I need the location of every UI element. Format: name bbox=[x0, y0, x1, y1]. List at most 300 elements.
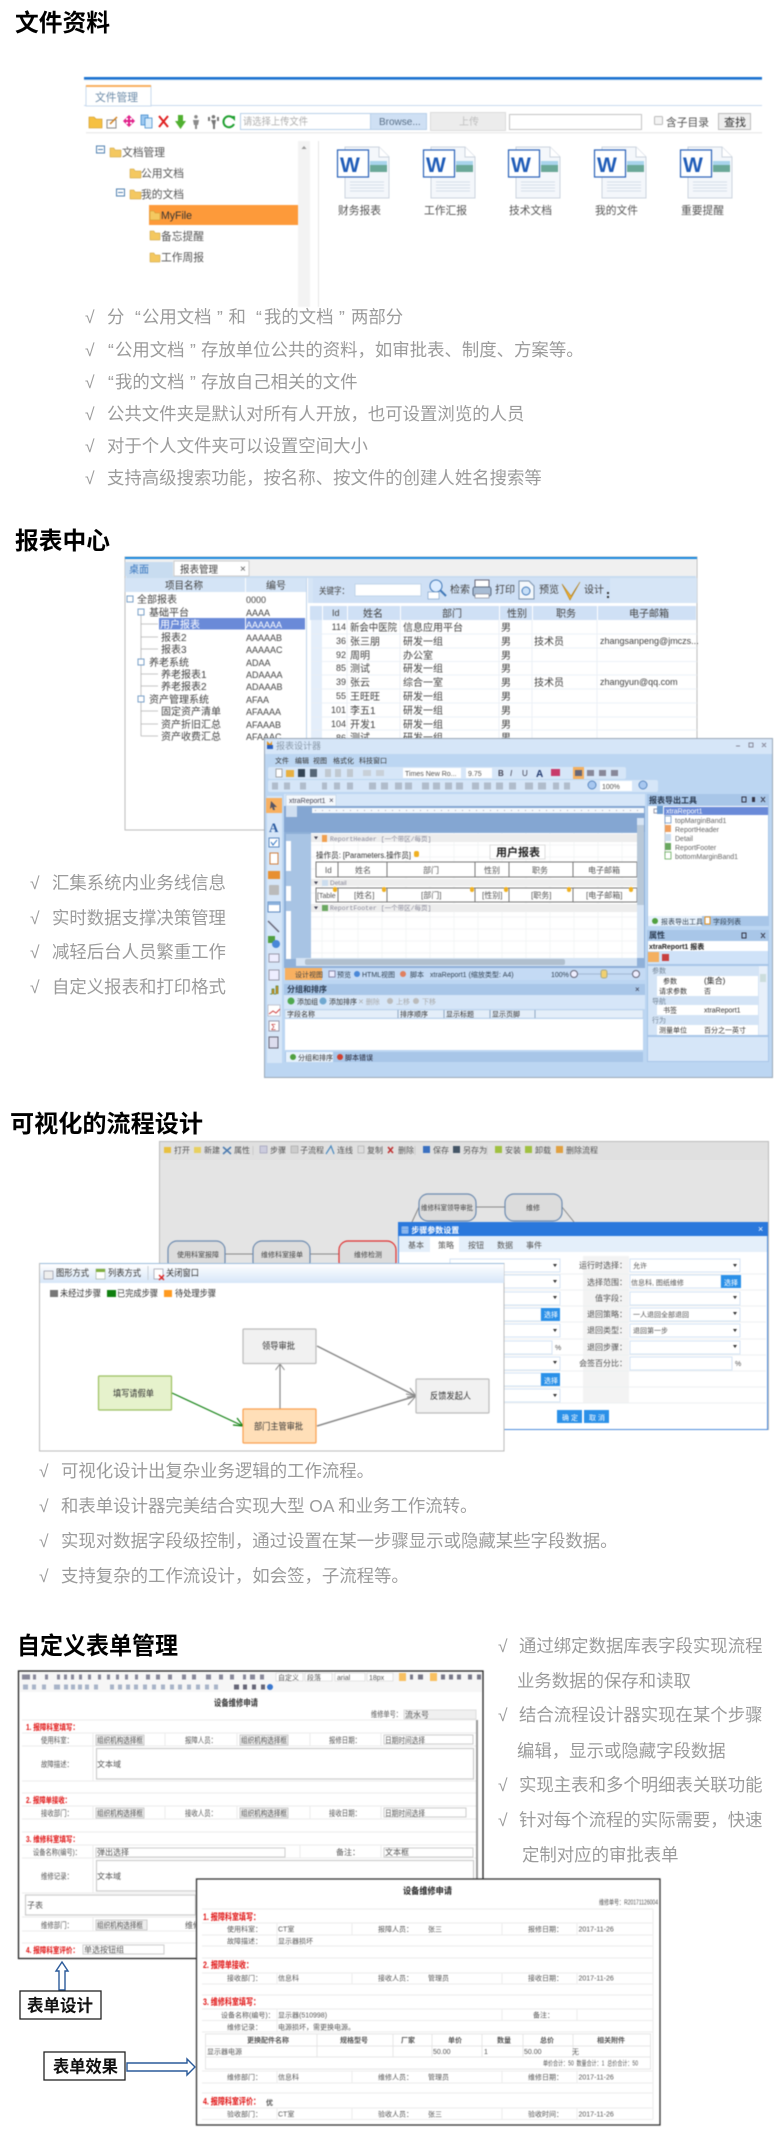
pane: 分组和排序: 排序顺序 bbox=[400, 1010, 428, 1018]
form title and number: 设备维修申请 bbox=[214, 1697, 258, 1708]
form section 1: 故障描述： bbox=[41, 1759, 73, 1769]
heading: 可视化的流程设计: 可视化的流程设计 bbox=[10, 1111, 203, 1138]
report tree grid: 固定资产清单 bbox=[161, 705, 221, 718]
report data table: 研发一组 bbox=[403, 662, 443, 675]
report data table: 男 bbox=[501, 719, 511, 731]
report data table: 信息应用平台 bbox=[403, 621, 463, 634]
report tree grid: ADAAAB bbox=[246, 682, 283, 692]
result section 2: 接收部门： bbox=[227, 1974, 262, 1982]
graph toolbar: 列表方式 bbox=[108, 1267, 141, 1278]
checkbox: 含子目录 bbox=[654, 115, 709, 129]
report tree grid: 0000 bbox=[246, 595, 266, 605]
text block: file feature bullets: √ bbox=[85, 404, 95, 424]
text block: form bullets: 结合流程设计器实现在某个步骤 bbox=[519, 1705, 762, 1725]
node: 反馈发起人: 反馈发起人 bbox=[430, 1390, 471, 1401]
text block: report bullets: 自定义报表和打印格式 bbox=[52, 977, 226, 997]
designer canvas: 操作员: [Parameters.操作员] bbox=[316, 850, 411, 860]
form section 3: 弹出选择 bbox=[97, 1847, 129, 1857]
designer status bar: 脚本 bbox=[410, 970, 424, 979]
designer canvas bbox=[284, 794, 645, 968]
file labels: 我的文件 bbox=[595, 203, 638, 217]
folder tree bbox=[96, 145, 298, 264]
text block: file feature bullets: “ bbox=[108, 372, 114, 392]
folder tree: 备忘提醒 bbox=[161, 229, 204, 243]
report data table: 办公室 bbox=[403, 649, 433, 662]
report data table: 综合一室 bbox=[403, 676, 443, 689]
report data table: 男 bbox=[501, 705, 511, 717]
pane: 报表导出工具: Detail bbox=[675, 836, 693, 843]
report data table: 研发一组 bbox=[403, 704, 443, 717]
report tree grid: 资产折旧汇总 bbox=[161, 718, 221, 731]
result section 3 bbox=[203, 1996, 554, 2031]
designer canvas: [Table bbox=[317, 893, 336, 900]
text block: file feature bullets: 分 bbox=[107, 307, 124, 327]
pane: 报表导出工具: ReportHeader bbox=[675, 827, 720, 834]
report data table: 研发一组 bbox=[403, 690, 443, 703]
dialog buttons: 取 消 bbox=[589, 1413, 605, 1422]
designer status bar: xtraReport1 (缩放类型: A4) bbox=[430, 970, 514, 979]
report tree grid: AAAAAA bbox=[246, 620, 282, 630]
report data table: 男 bbox=[501, 677, 511, 689]
workflow toolbar: 卸载 bbox=[535, 1145, 551, 1155]
report data table bbox=[310, 606, 699, 744]
text block: report bullets: √ bbox=[30, 908, 40, 928]
designer menu and toolbars: 编辑 bbox=[295, 756, 309, 765]
pane: 分组和排序: 添加组 bbox=[297, 997, 318, 1006]
button: 查找 bbox=[718, 114, 750, 130]
panel: report designer window bbox=[264, 738, 772, 1078]
pane: 分组和排序: × bbox=[635, 985, 640, 994]
result section 3: 备注： bbox=[533, 2011, 554, 2020]
designer menu and toolbars: 9.75 bbox=[468, 771, 482, 778]
dialog right column fields: 值字段： bbox=[595, 1293, 627, 1303]
form section 4: 4. 报障科室评价： bbox=[26, 1945, 79, 1955]
dialog buttons bbox=[557, 1410, 609, 1423]
dialog right column fields: 退回第一步 bbox=[633, 1326, 668, 1335]
designer menu and toolbars: 格式化 bbox=[333, 756, 354, 765]
result section 4: 2017-11-26 bbox=[578, 2112, 614, 2118]
result section 3: 设备名称(编号)： bbox=[221, 2011, 275, 2020]
result section 2: 接收人员： bbox=[378, 1974, 413, 1982]
tabs: 桌面 / 报表管理: × bbox=[240, 564, 246, 575]
text block: workflow bullets: √ bbox=[39, 1531, 49, 1551]
panel: form designer window bbox=[18, 1671, 483, 1958]
result repair row: 维修人员： bbox=[378, 2073, 413, 2082]
form section 1: 1. 报障科室填写： bbox=[26, 1722, 79, 1732]
report data table: 55 bbox=[336, 691, 346, 701]
graph toolbar: 图形方式 bbox=[56, 1267, 89, 1278]
report tree grid: AAAAAC bbox=[246, 645, 283, 655]
result parts table: 数量 bbox=[497, 2036, 511, 2045]
tree scrollbar bbox=[298, 141, 319, 307]
pane: 分组和排序: 下移 bbox=[422, 997, 436, 1006]
dialog right column fields: 允许 bbox=[633, 1261, 647, 1270]
report data table: 张三朋 bbox=[350, 636, 380, 648]
report tree grid: AAAAAB bbox=[246, 633, 282, 643]
designer canvas: 用户报表 bbox=[496, 845, 540, 859]
text block: form bullets: 实现主表和多个明细表关联功能 bbox=[519, 1775, 762, 1795]
text block: form bullets: 针对每个流程的实际需要，快速 bbox=[519, 1810, 762, 1830]
icon: word doc 重要提醒: W bbox=[683, 154, 703, 177]
pane: 属性: 参数 bbox=[652, 966, 666, 975]
designer status bar: 100% bbox=[551, 972, 569, 979]
report data table: 101 bbox=[331, 705, 346, 715]
report tree grid: 养老报表1 bbox=[161, 668, 207, 681]
result section 4: 优 bbox=[266, 2098, 273, 2107]
result repair row: 2017-11-26 bbox=[578, 2075, 614, 2082]
designer canvas: ReportFooter [一个带区/每页] bbox=[330, 903, 431, 912]
pane: 报表导出工具: bottomMarginBand1 bbox=[675, 854, 738, 861]
panel: workflow designer background window bbox=[160, 1142, 768, 1430]
result title bbox=[403, 1885, 658, 1906]
flow edges bbox=[172, 1346, 416, 1426]
node: 领导审批 bbox=[243, 1329, 316, 1364]
text block: workflow bullets: 和表单设计器完美结合实现大型 OA 和业务工作流转。 bbox=[61, 1496, 477, 1516]
report toolbar: 检索 bbox=[450, 583, 470, 596]
dialog right column fields: 退回步骤： bbox=[587, 1343, 627, 1352]
report data table: 性别 bbox=[507, 607, 527, 620]
report data table: 技术员 bbox=[534, 676, 564, 689]
designer status bar: 设计视图 bbox=[295, 970, 323, 979]
file labels: 财务报表 bbox=[338, 203, 381, 217]
report tree grid: 报表3 bbox=[161, 643, 187, 656]
pane: 分组和排序 bbox=[284, 984, 645, 1062]
legend: 待处理步骤 bbox=[175, 1288, 216, 1298]
designer canvas: Detail bbox=[330, 880, 347, 887]
folder tree: 文档管理 bbox=[122, 145, 165, 159]
result section 1: 张三 bbox=[428, 1924, 442, 1934]
workflow toolbar: 新建 bbox=[204, 1145, 220, 1155]
text block: file feature bullets: “ bbox=[135, 307, 141, 327]
step parameter dialog: 事件 bbox=[526, 1240, 542, 1250]
report data table: 男 bbox=[501, 636, 511, 648]
checkbox: 含子目录: 含子目录 bbox=[666, 115, 709, 129]
designer canvas: × bbox=[329, 796, 334, 805]
result section 2: 管理员 bbox=[428, 1974, 449, 1982]
designer menu and toolbars: 100% bbox=[602, 784, 620, 791]
designer left tool strip: A bbox=[269, 820, 279, 835]
result title: 设备维修申请 bbox=[403, 1885, 452, 1896]
form section 3: 备注： bbox=[336, 1847, 360, 1857]
report tree grid bbox=[125, 578, 307, 743]
dialog right column fields: 运行时选择： bbox=[579, 1260, 627, 1270]
text block: file feature bullets: ” bbox=[217, 307, 223, 327]
form section 2: 接收日期： bbox=[329, 1808, 361, 1818]
result section 4: 验收部门： bbox=[227, 2110, 262, 2118]
report data table: 测试 bbox=[350, 662, 370, 675]
panel: report manager window bbox=[125, 557, 699, 830]
text block: form bullets: 定制对应的审批表单 bbox=[522, 1845, 679, 1865]
flow nodes: background: 维修科室领导审批 bbox=[421, 1203, 473, 1212]
report data table: 男 bbox=[501, 622, 511, 634]
file labels: 重要提醒 bbox=[681, 203, 724, 217]
form section 1: 报修日期： bbox=[329, 1735, 361, 1745]
text block: workflow bullets: 实现对数据字段级控制，通过设置在某一步骤显示或隐藏某些字段数据。 bbox=[61, 1531, 618, 1551]
text block: form bullets: √ bbox=[498, 1810, 508, 1830]
editor toolbar: arial bbox=[337, 1675, 351, 1682]
text block: report bullets bbox=[30, 873, 226, 997]
panel: file manager screenshot bbox=[84, 77, 762, 307]
node: 填写请假单 bbox=[98, 1376, 172, 1410]
designer menu and toolbars: I bbox=[510, 769, 513, 778]
designer menu and toolbars: U bbox=[522, 769, 528, 778]
form section 3: 维修记录： bbox=[41, 1871, 73, 1881]
result section 1 bbox=[203, 1911, 614, 1946]
workflow toolbar: 删除流程 bbox=[566, 1145, 598, 1155]
report tree grid: ADAA bbox=[246, 658, 271, 668]
folder tree: 我的文档 bbox=[141, 187, 184, 201]
result parts table: 50.00 bbox=[524, 2049, 542, 2056]
icon: word doc 工作汇报 bbox=[424, 147, 475, 198]
form section 3: 维修部门： bbox=[41, 1920, 73, 1930]
node: 填写请假单: 填写请假单 bbox=[113, 1388, 154, 1398]
result parts table: 更换配件名称 bbox=[247, 2036, 289, 2045]
flow nodes: background: 维修 bbox=[526, 1203, 540, 1212]
folder tree: MyFile bbox=[161, 210, 192, 222]
form section 2: 日期时间选择 bbox=[385, 1808, 425, 1818]
text block: report bullets: √ bbox=[30, 977, 40, 997]
result section 1: 使用科室： bbox=[227, 1924, 262, 1934]
report data table: 36 bbox=[336, 636, 346, 646]
result section 1: 报障人员： bbox=[378, 1924, 413, 1934]
result section 1: 显示器损坏 bbox=[278, 1936, 313, 1946]
tab: 文件管理: 文件管理 bbox=[95, 90, 138, 104]
pane: 属性: 行为 bbox=[652, 1016, 666, 1024]
designer menu and toolbars: 文件 bbox=[275, 756, 289, 765]
report data table: 86 bbox=[336, 733, 346, 743]
dialog right column fields: % bbox=[735, 1361, 741, 1368]
label: 表单效果 bbox=[44, 2052, 125, 2080]
result section 4 bbox=[203, 2096, 614, 2118]
report data table: 男 bbox=[501, 650, 511, 662]
designer menu and toolbars bbox=[268, 756, 658, 792]
arrow: up to form design window bbox=[56, 1962, 68, 1990]
arrow: right to result window bbox=[127, 2059, 195, 2075]
designer title bar bbox=[265, 739, 772, 754]
designer left tool strip bbox=[266, 796, 282, 1063]
label: 表单效果: 表单效果 bbox=[53, 2058, 118, 2076]
dialog right column fields: 会签百分比： bbox=[579, 1358, 627, 1368]
workflow toolbar: 保存 bbox=[433, 1145, 449, 1155]
pane: 分组和排序: 显示页脚 bbox=[492, 1010, 520, 1018]
report data table: 周明 bbox=[350, 650, 370, 662]
report data table: Id bbox=[332, 608, 340, 618]
report data table: 研发一组 bbox=[403, 718, 443, 731]
pane: 分组和排序: 显示标题 bbox=[446, 1010, 474, 1018]
form section 1: 组织机构选择框 bbox=[241, 1735, 287, 1745]
workflow toolbar: 复制 bbox=[367, 1145, 383, 1155]
designer canvas: 姓名 bbox=[355, 865, 371, 875]
workflow toolbar: 连线 bbox=[337, 1145, 353, 1155]
report data table: 男 bbox=[501, 663, 511, 675]
designer menu and toolbars: 视图 bbox=[313, 756, 327, 765]
report tree grid: 全部报表 bbox=[137, 593, 177, 606]
step parameter dialog: 基本 bbox=[408, 1240, 424, 1250]
designer canvas: 部门 bbox=[423, 865, 439, 875]
flow nodes: background: 维修检测 bbox=[354, 1250, 382, 1259]
dialog left column visible fields: % bbox=[555, 1345, 561, 1352]
text block: file feature bullets: 对于个人文件夹可以设置空间大小 bbox=[107, 436, 368, 456]
designer canvas: [电子邮箱] bbox=[586, 890, 622, 900]
form section 2 bbox=[26, 1795, 466, 1818]
report data table: 104 bbox=[331, 719, 346, 729]
report data table: 部门 bbox=[442, 607, 462, 620]
editor toolbar: 段落 bbox=[307, 1673, 321, 1682]
designer canvas: xtraReport1 bbox=[289, 798, 326, 805]
text block: report bullets: 实时数据支撑决策管理 bbox=[52, 908, 226, 928]
text block: form bullets: √ bbox=[498, 1705, 508, 1725]
icon: word doc 我的文件 bbox=[594, 147, 646, 198]
text block: report bullets: 减轻后台人员繁重工作 bbox=[52, 942, 226, 962]
result parts table: 50.00 bbox=[433, 2049, 451, 2056]
report data table: 男 bbox=[501, 732, 511, 744]
text block: file feature bullets: 我的文档 bbox=[264, 307, 334, 327]
report data table: zhangsanpeng@jmczs... bbox=[600, 636, 699, 646]
form section 3: 组织机构选择框 bbox=[97, 1920, 143, 1930]
file labels: 技术文档 bbox=[509, 203, 552, 217]
form section 4: 单选按钮组 bbox=[84, 1944, 124, 1954]
text block: file feature bullets: 公用文档 bbox=[115, 340, 185, 360]
report data table: 研发一组 bbox=[403, 635, 443, 648]
pane: 属性: xtraReport1 bbox=[704, 1008, 741, 1014]
report data table: 张云 bbox=[350, 677, 370, 689]
report data table: 研发一组 bbox=[403, 731, 443, 744]
result section 2 bbox=[203, 1959, 614, 1982]
designer canvas: [职务] bbox=[531, 890, 551, 900]
pane: 报表导出工具: 字段列表 bbox=[713, 917, 741, 926]
text block: report bullets: √ bbox=[30, 873, 40, 893]
text block: report bullets: 汇集系统内业务线信息 bbox=[52, 873, 226, 893]
form section 3: 文本框 bbox=[385, 1847, 409, 1857]
form section 3: 3. 维修科室填写： bbox=[26, 1834, 79, 1844]
result section 2: 信息科 bbox=[278, 1974, 299, 1982]
dialog left column visible fields: 选择 bbox=[544, 1310, 558, 1319]
report tree grid: 项目名称 bbox=[165, 579, 203, 592]
text block: form bullets bbox=[498, 1636, 762, 1865]
node: 反馈发起人 bbox=[416, 1379, 489, 1413]
designer menu and toolbars: 科技窗口 bbox=[359, 756, 387, 765]
step parameter dialog bbox=[398, 1222, 768, 1430]
pane: 属性: 参数 bbox=[663, 976, 677, 986]
legend: 未经过步骤 bbox=[60, 1288, 101, 1298]
step parameter dialog: 按钮 bbox=[468, 1240, 484, 1250]
result repair row: 维修部门： bbox=[227, 2073, 262, 2082]
icon: word doc 我的文件: W bbox=[597, 154, 617, 177]
text block: workflow bullets bbox=[39, 1461, 618, 1586]
result parts table: 无 bbox=[572, 2048, 579, 2056]
form section 2: 组织机构选择框 bbox=[241, 1808, 287, 1818]
designer canvas: [性别] bbox=[482, 890, 502, 900]
editor toolbar: 18px bbox=[369, 1675, 385, 1682]
form section 3: 设备名称(编号)： bbox=[33, 1847, 81, 1857]
label: 表单设计: 表单设计 bbox=[27, 1996, 93, 2016]
text block: file feature bullets: √ bbox=[85, 307, 95, 327]
result parts table: 1 bbox=[484, 2049, 488, 2056]
text block: file feature bullets: 两部分 bbox=[351, 307, 403, 327]
file labels: 工作汇报 bbox=[424, 203, 467, 217]
designer menu and toolbars: Times New Ro... bbox=[405, 771, 457, 778]
form section 1: 文本域 bbox=[97, 1759, 121, 1769]
designer status bar: 预览 bbox=[337, 970, 351, 979]
text block: form bullets: √ bbox=[498, 1775, 508, 1795]
folder tree: 工作周报 bbox=[161, 250, 204, 264]
heading: 文件资料: 文件资料 bbox=[15, 9, 110, 37]
form section 1: 使用科室： bbox=[41, 1735, 73, 1745]
text block: file feature bullets: ” bbox=[190, 372, 196, 392]
pane: 报表导出工具: xtraReport1 bbox=[666, 808, 703, 816]
report tree grid: AFAAAB bbox=[246, 720, 281, 730]
result parts table: 单价 bbox=[448, 2036, 462, 2045]
editor toolbar: 自定义 bbox=[278, 1673, 299, 1682]
designer menu and toolbars: A bbox=[536, 769, 543, 780]
report toolbar: 预览 bbox=[539, 583, 559, 596]
form section 3 bbox=[26, 1834, 474, 1930]
report data table: 技术员 bbox=[534, 635, 564, 648]
pane: 分组和排序: 添加排序 bbox=[329, 997, 357, 1006]
result section 1: 1. 报障科室填写： bbox=[203, 1911, 260, 1922]
upload file input bbox=[240, 114, 426, 130]
pane: 属性 bbox=[647, 930, 769, 1062]
form section 1: 组织机构选择框 bbox=[97, 1735, 143, 1745]
designer canvas: ReportHeader [一个带区/每页] bbox=[330, 834, 431, 843]
result parts table: 单价合计：50 数量合计：1 总价合计：50 bbox=[543, 2059, 638, 2068]
tabs: 桌面 / 报表管理: 报表管理 bbox=[180, 563, 218, 576]
result section 4: 4. 报障科室评价： bbox=[203, 2096, 260, 2106]
step parameter dialog: 数据 bbox=[497, 1240, 513, 1250]
graph toolbar: 关闭窗口 bbox=[166, 1267, 199, 1278]
dialog right column fields: 选择范围： bbox=[587, 1277, 627, 1287]
pane: 属性: 百分之一英寸 bbox=[704, 1026, 746, 1034]
form section 1: 日期时间选择 bbox=[385, 1735, 425, 1745]
result section 1: 故障描述： bbox=[227, 1936, 262, 1946]
form grid bbox=[22, 1720, 478, 1955]
text block: file feature bullets: 公共文件夹是默认对所有人开放，也可设置浏览的人员 bbox=[107, 404, 524, 424]
editor toolbar bbox=[20, 1672, 482, 1692]
pane: 属性: 测量单位 bbox=[659, 1026, 687, 1034]
text block: workflow bullets: √ bbox=[39, 1566, 49, 1586]
legend: 已完成步骤 bbox=[117, 1288, 158, 1298]
flow nodes: background: 使用科室报障 bbox=[177, 1250, 219, 1259]
designer canvas: 电子邮箱 bbox=[588, 865, 620, 875]
report data table: 92 bbox=[336, 650, 346, 660]
upload file input: Browse... bbox=[379, 117, 421, 128]
designer status bar: HTML视图 bbox=[362, 970, 395, 979]
text block: form bullets: 通过绑定数据库表字段实现流程 bbox=[519, 1636, 762, 1656]
form title and number: 流水号 bbox=[405, 1710, 429, 1720]
button: 上传: 上传 bbox=[459, 116, 479, 128]
designer canvas: [姓名] bbox=[354, 890, 374, 900]
result section 4: 验收时间： bbox=[528, 2110, 563, 2118]
result section 3: 维修记录： bbox=[227, 2022, 262, 2031]
result section 2: 接收日期： bbox=[528, 1974, 563, 1982]
text block: workflow bullets: √ bbox=[39, 1461, 49, 1481]
panel: workflow graph window bbox=[40, 1263, 504, 1451]
node: 部门主管审批: 部门主管审批 bbox=[254, 1420, 303, 1432]
report tree grid: 编号 bbox=[266, 579, 286, 592]
text block: form bullets: 业务数据的保存和读取 bbox=[517, 1671, 691, 1691]
dialog left column visible fields: 选择 bbox=[544, 1376, 558, 1385]
report data table: 新会中医院 bbox=[350, 621, 397, 634]
step parameter dialog: ▦ 步骤参数设置 bbox=[401, 1225, 459, 1235]
text block: form bullets: √ bbox=[498, 1636, 508, 1656]
text block: file feature bullets: ” bbox=[339, 307, 345, 327]
pane: 属性: (集合) bbox=[704, 976, 726, 986]
node: 部门主管审批 bbox=[243, 1409, 316, 1443]
report data table: 男 bbox=[501, 691, 511, 703]
step parameter dialog: 策略 bbox=[438, 1240, 454, 1250]
pane: 分组和排序: 脚本错误 bbox=[345, 1053, 373, 1062]
report tree grid: AAAA bbox=[246, 608, 270, 618]
